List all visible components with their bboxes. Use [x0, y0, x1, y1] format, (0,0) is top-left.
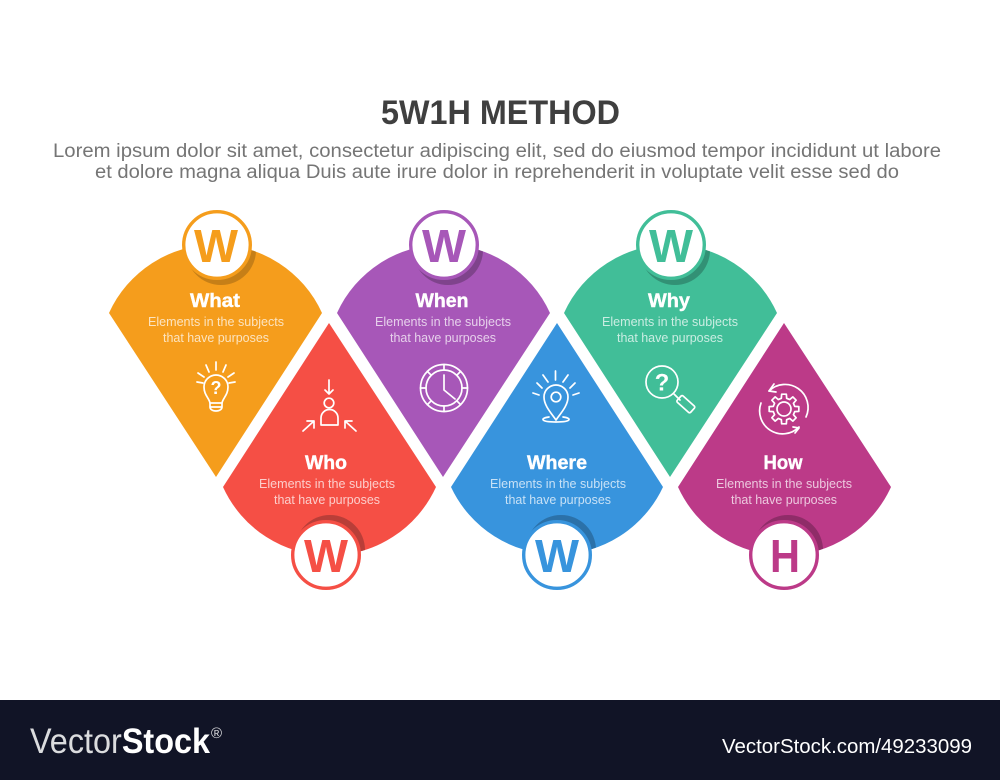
panel: when	[337, 212, 550, 477]
description: what: that have purposes	[163, 331, 269, 345]
icon: light bulb: ?	[210, 378, 222, 398]
footer logo: VectorStock	[30, 722, 210, 761]
description: why: that have purposes	[617, 331, 723, 345]
registered mark: ®	[211, 725, 222, 742]
badge: W	[524, 522, 590, 588]
badge: W	[411, 212, 477, 278]
icon: magnifier with question mark: ?	[655, 370, 669, 396]
badge: H: H	[770, 530, 800, 582]
badge: W	[638, 212, 704, 278]
badge: W: W	[194, 220, 239, 272]
description: how	[716, 477, 852, 507]
description: what: Elements in the subjects	[148, 315, 284, 329]
heading: when: When	[416, 291, 468, 312]
footer bar	[0, 700, 1000, 780]
description: how: that have purposes	[731, 493, 837, 507]
description: what	[148, 315, 284, 345]
footer url: VectorStock.com/49233099	[722, 736, 972, 758]
description: where	[490, 477, 626, 507]
heading: how: How	[764, 453, 803, 474]
icon: magnifier with question mark	[646, 366, 695, 413]
title: 5W1H METHOD	[381, 94, 620, 132]
badge: H	[751, 522, 817, 588]
icon: gear cycle	[760, 384, 808, 434]
description: where: that have purposes	[505, 493, 611, 507]
badge: W: W	[535, 530, 580, 582]
description: when: that have purposes	[390, 331, 496, 345]
description: when: Elements in the subjects	[375, 315, 511, 329]
panel: where	[451, 323, 663, 588]
description: how: Elements in the subjects	[716, 477, 852, 491]
description: why: Elements in the subjects	[602, 315, 738, 329]
description: who	[259, 477, 395, 507]
description: who: that have purposes	[274, 493, 380, 507]
badge: W	[184, 212, 250, 278]
intro text: et dolore magna aliqua Duis aute irure dolor in reprehenderit in voluptate velit esse sed do	[95, 162, 899, 183]
description: when	[375, 315, 511, 345]
icon: clock	[420, 364, 468, 412]
heading: where: Where	[527, 453, 587, 474]
panel: how	[678, 323, 891, 588]
panel: why	[564, 212, 777, 477]
description: who: Elements in the subjects	[259, 477, 395, 491]
icon: person with arrows	[303, 380, 356, 431]
badge: W: W	[649, 220, 694, 272]
icon: location pin	[533, 371, 579, 422]
description: why	[602, 315, 738, 345]
panel: what	[109, 212, 322, 477]
badge: W	[293, 522, 359, 588]
description: where: Elements in the subjects	[490, 477, 626, 491]
heading: why: Why	[648, 291, 690, 312]
panel: who	[223, 323, 436, 588]
heading: what: What	[190, 291, 241, 312]
heading: who: Who	[305, 453, 347, 474]
badge: W: W	[304, 530, 349, 582]
intro text: Lorem ipsum dolor sit amet, consectetur adipiscing elit, sed do eiusmod tempor incididunt ut labore	[53, 141, 941, 162]
badge: W: W	[422, 220, 467, 272]
intro text	[53, 141, 941, 183]
icon: light bulb	[197, 362, 235, 411]
